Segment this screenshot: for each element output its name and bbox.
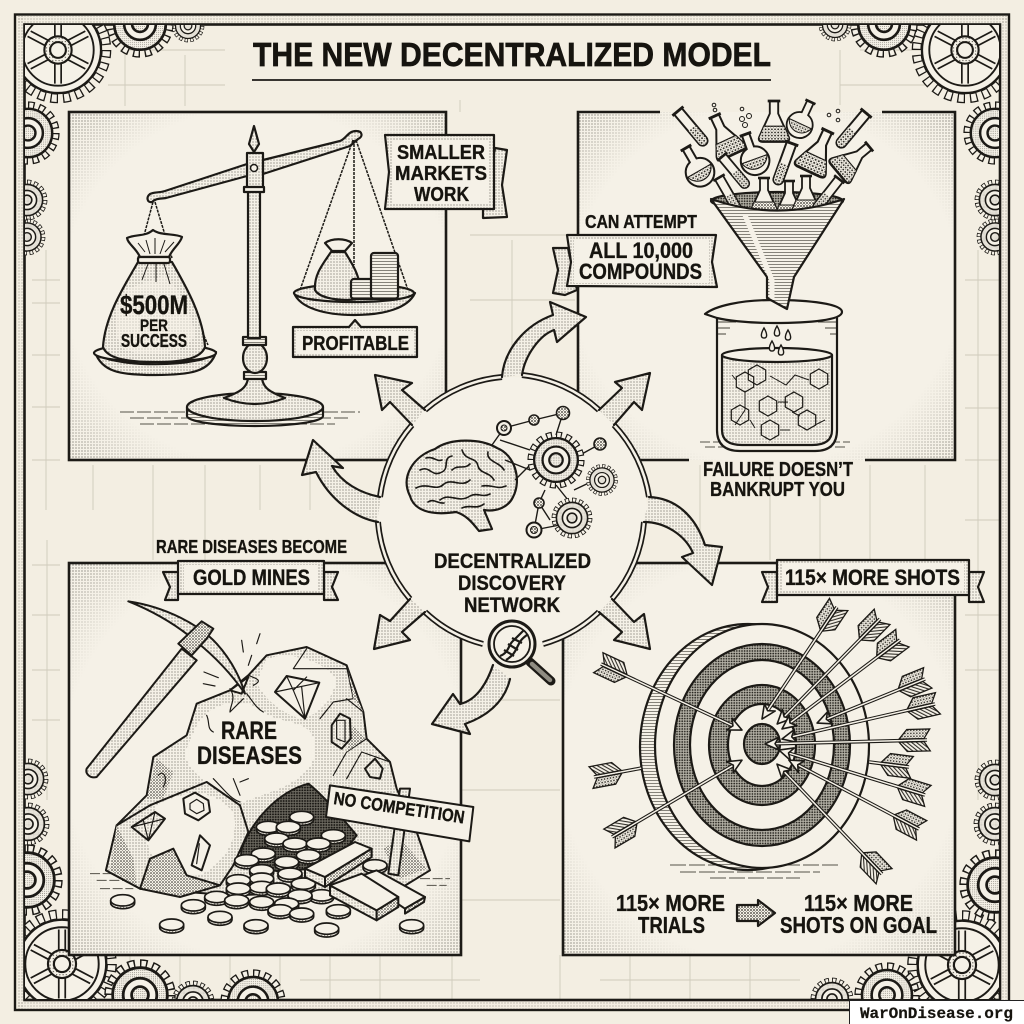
gear: top right large bbox=[912, 25, 999, 104]
arrow: curved to top right panel bbox=[502, 302, 586, 377]
icon: gold bars bbox=[305, 842, 425, 920]
gear: top left large bbox=[25, 25, 112, 104]
icon: magnifying glass with dna bbox=[489, 621, 551, 681]
callout: can attempt all 10,000 compounds bbox=[553, 212, 717, 295]
text: 115x more shots on goal bbox=[780, 890, 937, 938]
callout: smaller markets work: SMALLER bbox=[397, 142, 485, 164]
text: 115x more trials: 115× MORE bbox=[616, 890, 725, 916]
panel: can attempt all compounds (funnel and beaker) bbox=[553, 96, 955, 501]
callout: rare diseases become gold mines: GOLD MINES bbox=[193, 565, 310, 590]
icon: sign post bbox=[388, 789, 410, 875]
text: 115x more trials: TRIALS bbox=[638, 912, 705, 938]
callout: rare diseases become gold mines bbox=[156, 537, 347, 600]
icon: arrow between captions bbox=[737, 900, 775, 926]
icon: small bag, coins and right pan bbox=[294, 140, 415, 315]
hub label: NETWORK bbox=[464, 594, 560, 617]
arrow: to top left panel bbox=[375, 375, 425, 425]
gear: bottom right large bbox=[907, 910, 999, 999]
arrow: curved to bottom right panel bbox=[644, 497, 722, 585]
label: profitable: PROFITABLE bbox=[302, 333, 409, 355]
text: rare diseases: RARE bbox=[221, 717, 277, 745]
central hub: decentralized discovery network bbox=[302, 302, 722, 734]
title: THE NEW DECENTRALIZED MODEL bbox=[253, 37, 771, 74]
text: 115x more shots on goal: SHOTS ON GOAL bbox=[780, 912, 937, 938]
icon: coin pile bbox=[111, 811, 424, 937]
watermark: WarOnDisease.org bbox=[860, 1005, 1013, 1023]
text: 115x more shots on goal: 115× MORE bbox=[804, 890, 913, 916]
panel: smaller markets work (balance scale) bbox=[69, 112, 507, 460]
arrow: curved to bottom left panel bbox=[432, 665, 510, 734]
arrow: down left diagonal bbox=[374, 599, 425, 649]
caption: failure doesn't bankrupt you: BANKRUPT YOU bbox=[710, 478, 845, 501]
arrow: curved to top left panel bbox=[302, 440, 380, 522]
icon: scale beam bbox=[148, 131, 362, 202]
hub label: DISCOVERY bbox=[458, 572, 566, 595]
label: profitable bbox=[293, 320, 417, 357]
callout: can attempt all 10,000 compounds: CAN ATTEMPT bbox=[585, 212, 697, 232]
icon: archery target bbox=[640, 624, 869, 878]
icon: rock pile with gems and gold bbox=[86, 601, 473, 937]
icon: large money bag with left pan: $500M bbox=[120, 290, 188, 320]
callout: 115x more shots: 115× MORE SHOTS bbox=[785, 565, 960, 590]
arrow: down right diagonal bbox=[599, 599, 650, 649]
icon: funnel bbox=[711, 174, 844, 309]
icon: large money bag with left pan: SUCCESS bbox=[121, 331, 187, 351]
icon: large money bag with left pan: PER bbox=[140, 316, 168, 335]
icon: large money bag with left pan bbox=[94, 202, 216, 375]
caption: failure doesn't bankrupt you: FAILURE DOESN’T bbox=[703, 458, 853, 481]
hub label bbox=[434, 550, 591, 617]
icon: beaker with molecules bbox=[700, 300, 850, 451]
icon: arrows in target bbox=[589, 598, 940, 884]
text: rare diseases: DISEASES bbox=[197, 742, 302, 770]
icon: falling flasks bbox=[672, 96, 879, 192]
icon: gems bbox=[132, 676, 383, 870]
callout: smaller markets work bbox=[385, 135, 507, 218]
callout: can attempt all 10,000 compounds: ALL 10,000 bbox=[589, 238, 693, 263]
text: 115x more trials bbox=[616, 890, 725, 938]
panel: 115x more shots (target and arrows) bbox=[563, 560, 984, 955]
caption: failure doesn't bankrupt you bbox=[703, 458, 853, 501]
callout: smaller markets work: MARKETS bbox=[395, 163, 487, 185]
gear: bottom left large bbox=[25, 909, 117, 999]
callout: can attempt all 10,000 compounds: COMPOUNDS bbox=[579, 259, 702, 284]
hub label: DECENTRALIZED bbox=[434, 550, 591, 573]
callout: smaller markets work: WORK bbox=[414, 184, 469, 206]
callout: 115x more shots bbox=[762, 560, 984, 602]
hub ring arcs bbox=[378, 375, 649, 644]
watermark bbox=[850, 1000, 1024, 1024]
icon: pickaxe bbox=[86, 601, 260, 777]
panel: rare diseases become gold mines bbox=[69, 537, 473, 955]
icon: network of gears and nodes bbox=[492, 406, 616, 538]
icon: brain bbox=[407, 441, 517, 531]
arrow: up right diagonal bbox=[599, 373, 650, 425]
icon: balance scale stand bbox=[120, 126, 360, 426]
text: no competition sign: NO COMPETITION bbox=[332, 788, 466, 827]
text: rare diseases bbox=[197, 717, 302, 770]
sign board bbox=[326, 785, 473, 841]
callout: rare diseases become gold mines: RARE DISEASES BECOME bbox=[156, 537, 347, 557]
